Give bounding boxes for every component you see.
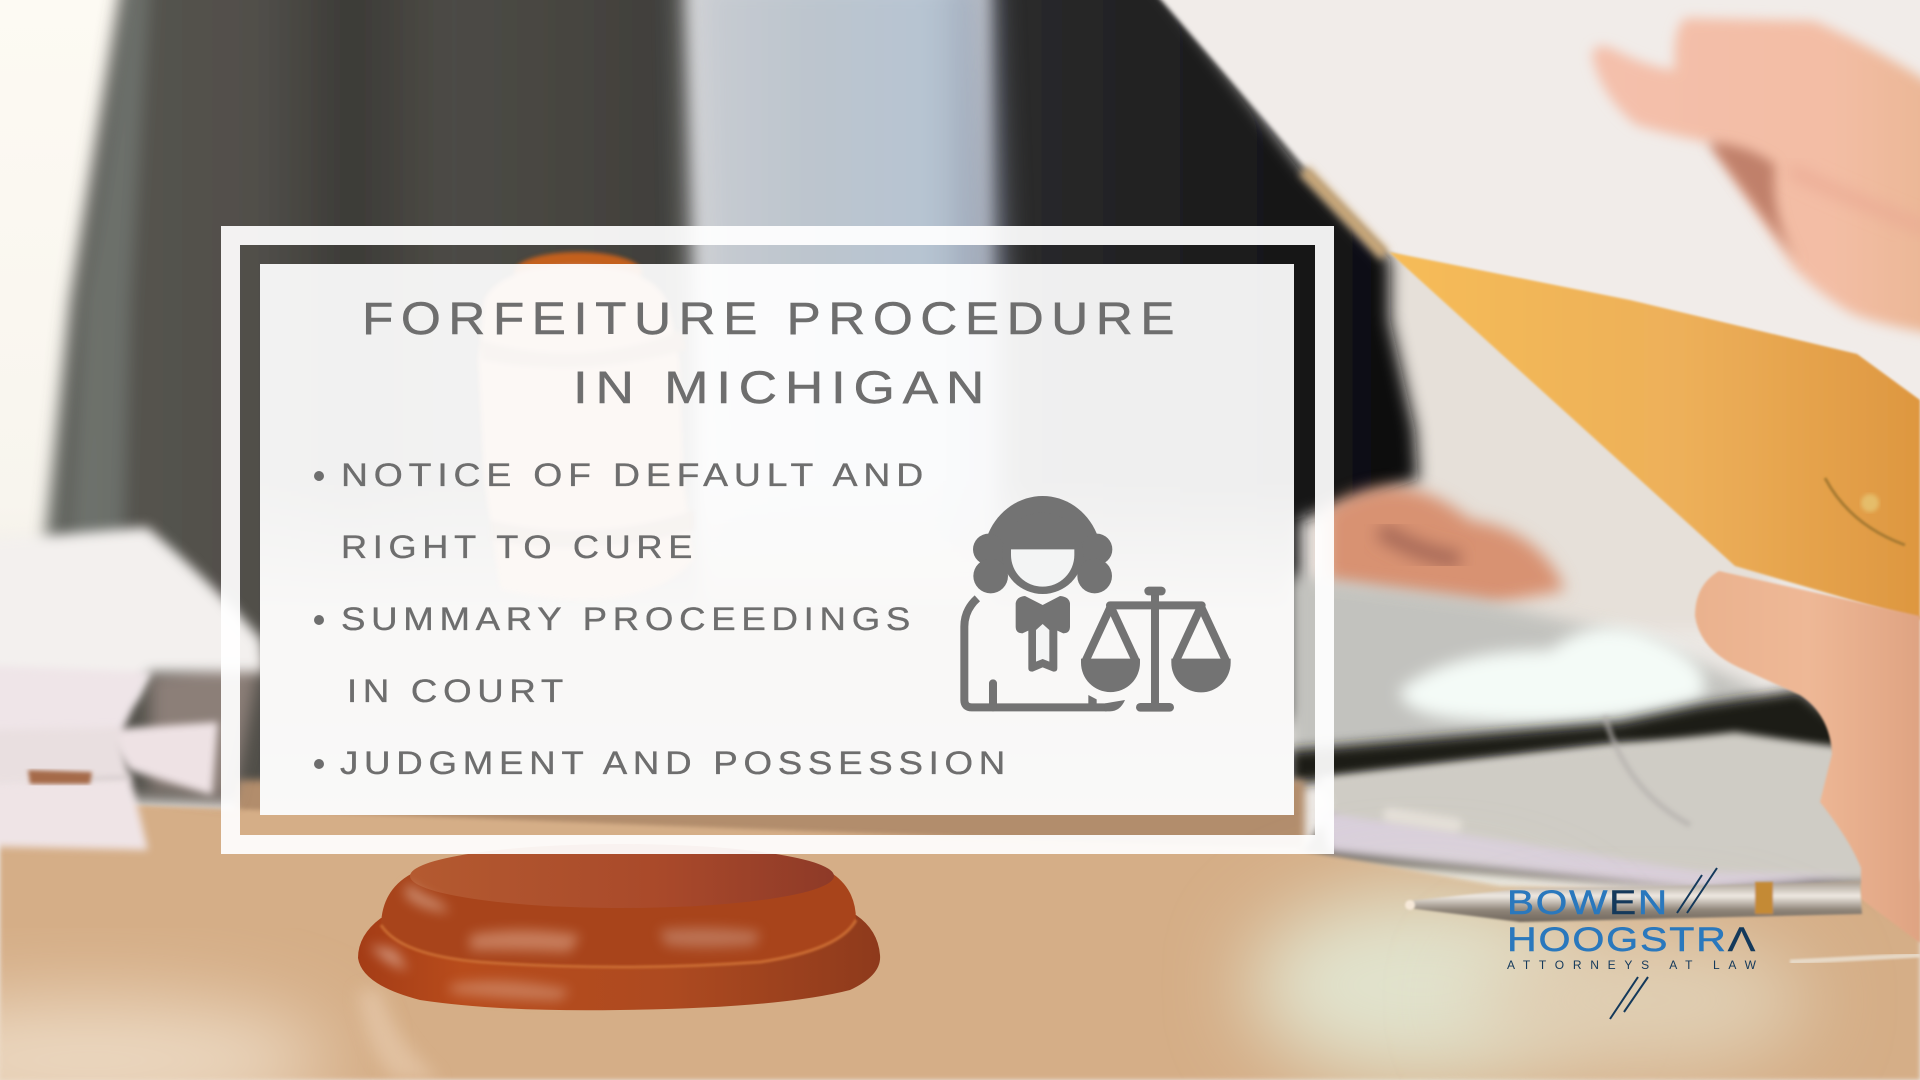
block top face — [410, 844, 834, 908]
bow tie — [1016, 596, 1070, 672]
block highlights — [370, 882, 760, 1000]
block lower tier — [358, 915, 880, 1010]
title — [362, 293, 1182, 413]
cream wall right — [1370, 250, 1770, 630]
logo wordmark: BOW EN — [1507, 884, 1669, 922]
outer white frame — [221, 226, 1334, 854]
title: FORFEITURE PROCEDURE — [362, 293, 1182, 344]
block upper tier — [381, 874, 856, 967]
bullet list — [314, 457, 1011, 781]
clipboard — [1290, 575, 1850, 785]
suit jacket — [40, 0, 1418, 800]
table behind panel strip — [235, 780, 1305, 850]
midtone under panel — [260, 480, 1294, 815]
thread — [1790, 955, 1920, 962]
scales — [1081, 591, 1231, 707]
icon: judge with scales — [964, 496, 1231, 711]
bullet 1: RIGHT TO CURE — [341, 529, 698, 565]
block tier seam — [381, 920, 856, 967]
papers on right — [1295, 732, 1880, 890]
face — [1011, 549, 1074, 587]
gavel sound block — [358, 844, 880, 1010]
bullet 2 — [314, 601, 916, 709]
reflection — [358, 990, 440, 1080]
robe — [964, 598, 1125, 711]
logo slashes — [1610, 868, 1717, 1019]
wig — [973, 496, 1112, 594]
logo: Bowen Hoogstra — [1507, 868, 1757, 1019]
title: IN MICHIGAN — [573, 362, 992, 413]
pen — [1405, 882, 1862, 922]
bullet 1: NOTICE OF DEFAULT AND — [341, 457, 929, 493]
bullet 3: JUDGMENT AND POSSESSION — [340, 745, 1011, 781]
bullet 2: IN COURT — [347, 673, 569, 709]
gavel head behind panel — [478, 252, 694, 600]
hand holding document — [1592, 18, 1920, 335]
bullet 1 — [314, 457, 929, 565]
blurred hand behind panel — [1325, 487, 1565, 605]
document edge — [1304, 170, 1385, 255]
table light patches — [1250, 890, 1590, 1080]
window light left — [0, 0, 180, 720]
logo tagline: ATTORNEYS AT LAW — [1507, 958, 1757, 972]
logo: Bowen Hoogstra: HOOGSTR Λ — [1507, 921, 1757, 959]
bullet 2: SUMMARY PROCEEDINGS — [341, 601, 916, 637]
table — [0, 800, 1920, 1080]
large white document — [1144, 0, 1920, 420]
manila folder — [1389, 252, 1920, 620]
document stack left — [0, 527, 264, 850]
inner panel — [260, 264, 1294, 815]
thumb holding folder — [1695, 571, 1920, 943]
